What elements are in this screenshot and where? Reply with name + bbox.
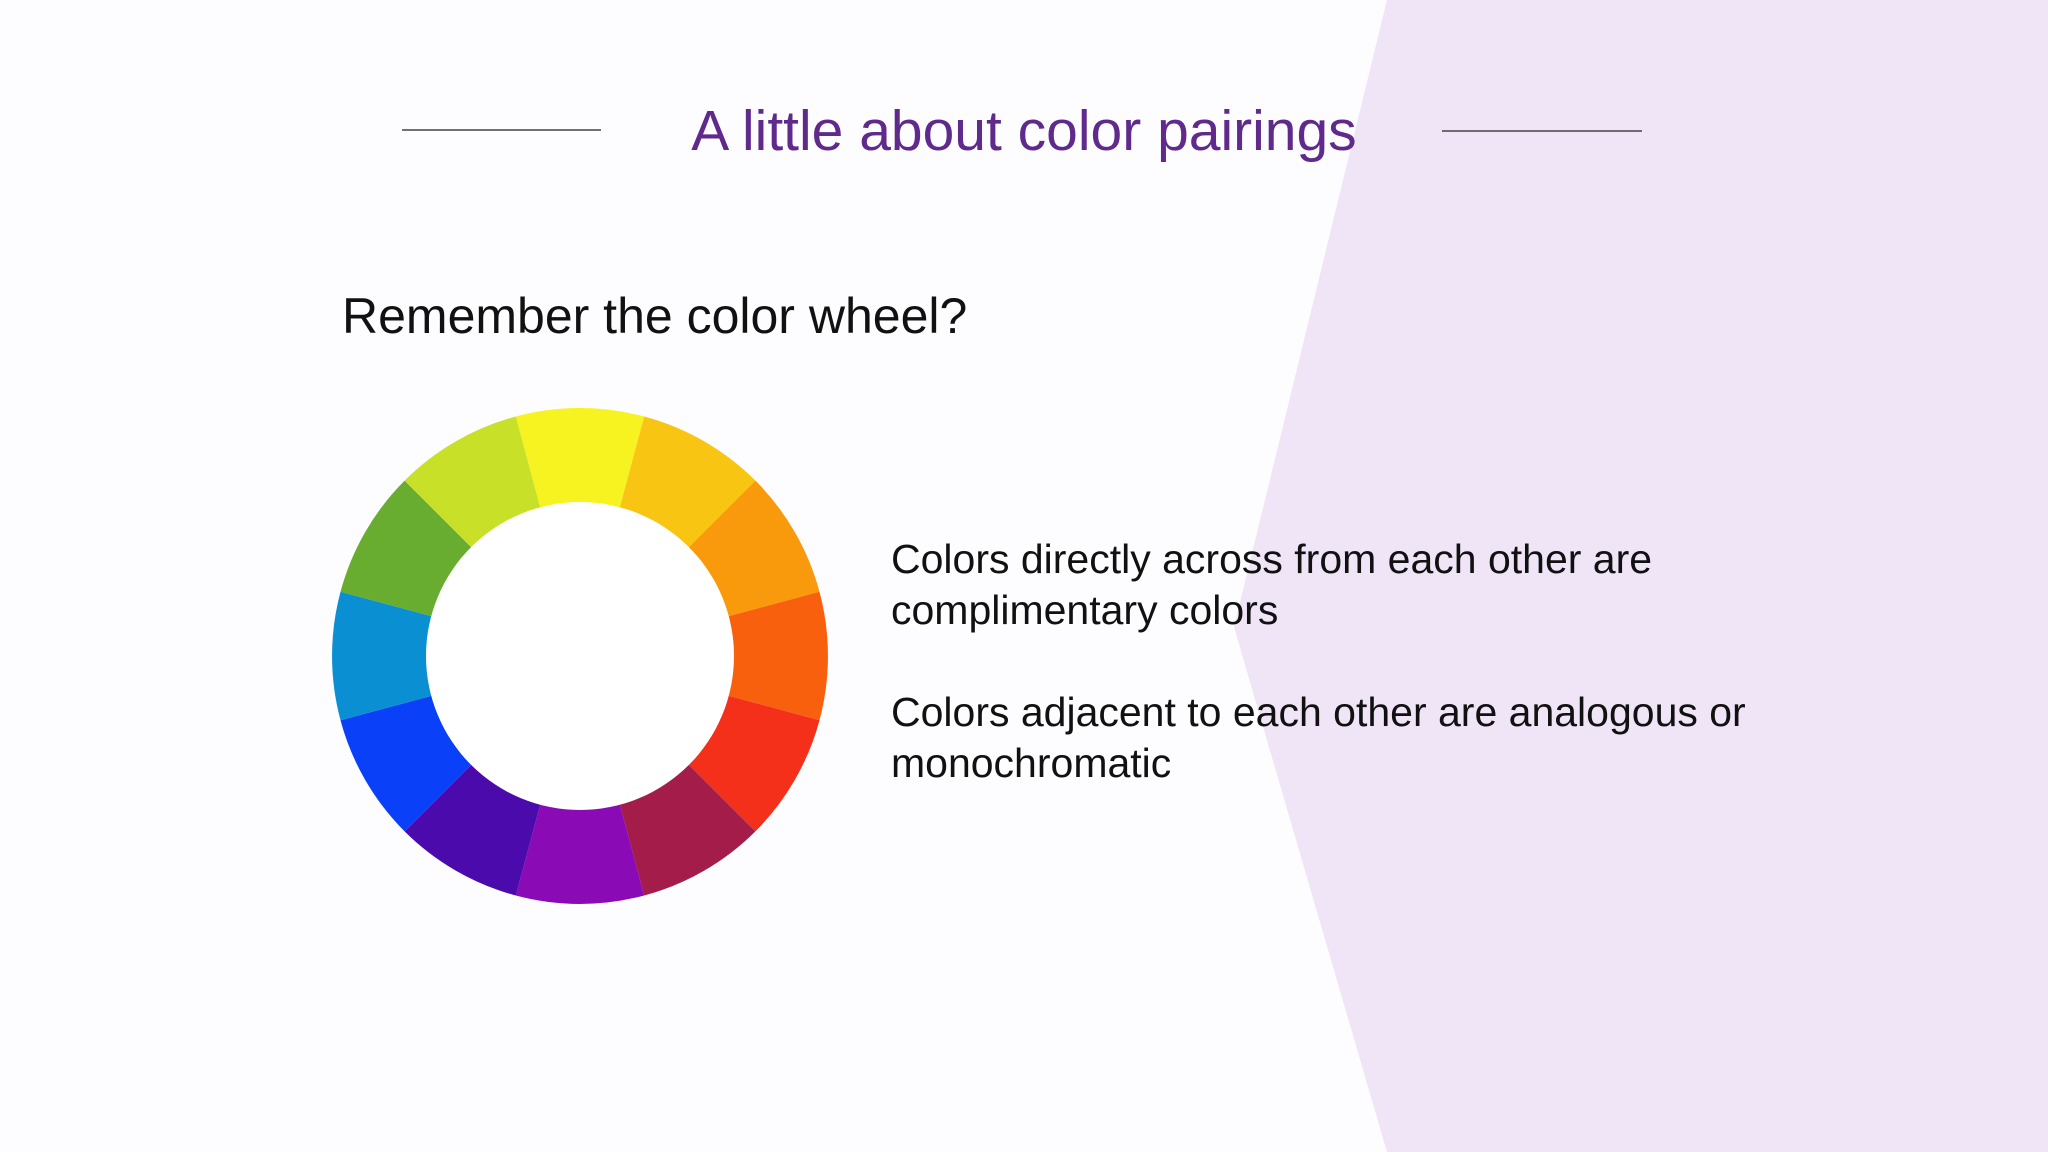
chart: color wheel (332, 408, 828, 904)
text block: analogous (891, 689, 1746, 786)
text block: analogous: Colors adjacent to each other are analogous or (891, 689, 1746, 735)
text block: analogous: monochromatic (891, 740, 1171, 786)
text block: complementary (891, 536, 1652, 633)
title: A little about color pairings (691, 99, 1357, 163)
text block: complementary: Colors directly across from each other are (891, 536, 1652, 582)
heading: remember: Remember the color wheel? (342, 288, 967, 344)
text block: complementary: complimentary colors (891, 587, 1278, 633)
